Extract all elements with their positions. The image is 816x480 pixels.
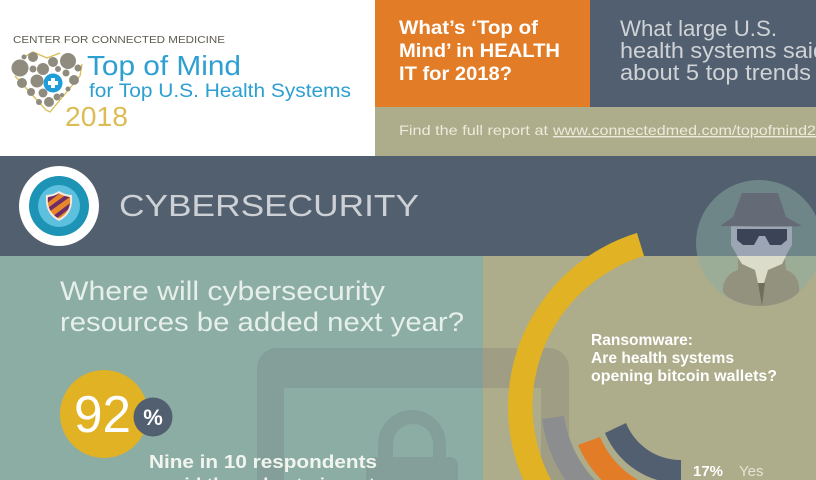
stat: 92 percent: % [143, 405, 163, 430]
ring: orange [578, 437, 638, 480]
heading: resources question: resources be added next year? [60, 307, 464, 337]
heading: ransomware question: Ransomware: [591, 332, 693, 349]
heading: ransomware question: opening bitcoin wallets? [591, 368, 777, 385]
chart: ransomware radial rings [508, 233, 681, 480]
panel: navy intro: about 5 top trends [620, 60, 811, 85]
panel: logo header [0, 0, 375, 156]
label: 17 percent yes: 17% [693, 463, 723, 480]
panel: ransomware [483, 256, 816, 480]
logo organisation name: CENTER FOR CONNECTED MEDICINE [13, 34, 225, 46]
panel: navy intro: health systems said [620, 38, 816, 63]
spy face [731, 226, 792, 257]
ring: yellow [508, 233, 644, 480]
stat: 92 percent [60, 370, 172, 458]
spy tie [758, 283, 765, 306]
icon: shield badge [19, 166, 99, 246]
ring: gray [542, 416, 595, 480]
text: stat description: Nine in 10 respondents [149, 451, 377, 472]
label: 17 percent yes [693, 463, 763, 480]
panel: report link strip: Find the full report at [399, 122, 548, 138]
logo subtitle: for Top U.S. Health Systems [89, 80, 351, 102]
panel: cybersecurity banner [0, 156, 816, 256]
spy neck [737, 256, 786, 283]
label: 17 percent yes: Yes [739, 463, 763, 480]
heading: resources question: Where will cybersecurity [60, 276, 386, 306]
logo year: 2018 [65, 101, 128, 132]
ring: dark [605, 423, 681, 480]
spy coat [723, 258, 799, 306]
panel: navy intro [590, 0, 816, 107]
spy hat [720, 193, 802, 226]
heading: ransomware question: Are health systems [591, 350, 734, 367]
panel: orange headline: What’s ‘Top of [399, 18, 539, 39]
panel: report link strip: www.connectedmed.com/topofmind2 [552, 122, 816, 138]
panel: resources [0, 256, 483, 480]
icon: background lock frame [257, 348, 569, 480]
banner title: CYBERSECURITY [119, 188, 419, 223]
icon: heart of dots [12, 52, 82, 112]
panel: report link strip [375, 107, 816, 156]
spy sunglasses [737, 229, 787, 245]
panel: orange headline: IT for 2018? [399, 64, 512, 85]
panel: orange headline: Mind’ in HEALTH [399, 41, 560, 62]
icon: spy figure [696, 180, 816, 306]
panel: navy intro: What large U.S. [620, 16, 777, 41]
stat: 92 percent: 92 [74, 386, 131, 444]
panel: orange headline [375, 0, 590, 107]
logo title: Top of Mind [87, 50, 241, 81]
